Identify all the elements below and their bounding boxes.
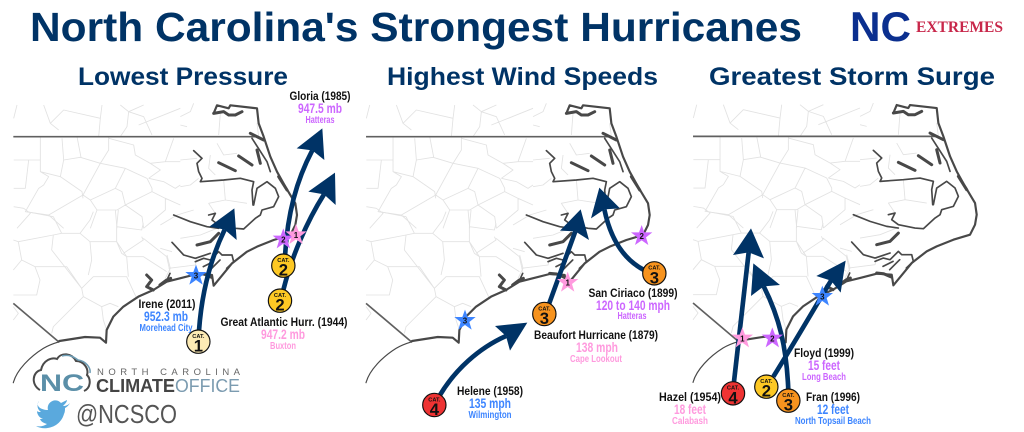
logo: NC Extremes: EXTREMES: [916, 19, 1003, 36]
star: rank 1: [557, 272, 578, 292]
marker: category 4: [423, 393, 446, 419]
label: San Ciriaco: Hatteras: [618, 310, 647, 322]
label: Floyd: 15 feet: [808, 358, 840, 373]
star: rank 1: 1: [740, 334, 745, 343]
title: North Carolina's Strongest Hurricanes: [30, 4, 802, 50]
map: North Carolina counties: [366, 103, 650, 383]
logo: NC Climate Office: NORTH CAROLINA: [97, 367, 241, 378]
star: rank 1: 1: [294, 231, 299, 240]
label: Hazel: 18 feet: [674, 402, 706, 417]
marker: category 2: [755, 375, 778, 401]
panel: highest wind speeds: [366, 63, 678, 421]
star: rank 2: 2: [281, 235, 286, 244]
marker: category 2: CAT.: [277, 258, 290, 264]
marker: category 3: [777, 389, 800, 415]
label: Fran: North Topsail Beach: [795, 415, 871, 427]
arrow: Gloria: [285, 128, 324, 257]
label: Helene: Wilmington: [468, 409, 512, 421]
label: Gloria: [290, 89, 350, 126]
marker: category 2: 2: [275, 296, 285, 315]
label: Hazel: [659, 390, 721, 427]
marker: category 3: 3: [540, 309, 549, 328]
label: Beaufort Hurricane: Beaufort Hurricane (1879): [534, 328, 658, 342]
logo: NC Climate Office: CLIMATE: [96, 375, 175, 396]
label: Floyd: Long Beach: [802, 371, 846, 383]
marker: category 3: 3: [784, 396, 793, 415]
star: rank 2: [273, 228, 294, 248]
marker: category 3: CAT.: [648, 266, 661, 272]
label: Beaufort Hurricane: [534, 328, 658, 365]
label: Gloria: 947.5 mb: [298, 101, 342, 116]
arrow: Helene: [440, 323, 527, 395]
label: Beaufort Hurricane: Cape Lookout: [570, 353, 622, 365]
label: San Ciriaco: [588, 286, 678, 322]
star: rank 2: [631, 225, 652, 245]
marker: category 2: [268, 289, 292, 315]
star: rank 3: 3: [463, 317, 468, 326]
label: San Ciriaco: 120 to 140 mph: [596, 298, 670, 313]
marker: category 2: [272, 254, 295, 280]
label: Hazel: Calabash: [672, 415, 708, 427]
handle: @NCSCO: [76, 401, 177, 429]
star: rank 1: [285, 224, 307, 244]
star: rank 3: [185, 265, 207, 285]
marker: category 4: 4: [430, 400, 440, 419]
logo: NC Climate Office: OFFICE: [175, 375, 240, 396]
arrow: Great Atlantic: [283, 173, 336, 290]
panel: lowest pressure: [13, 63, 350, 383]
marker: category 3: CAT.: [782, 393, 795, 399]
arrow: Irene: [199, 208, 237, 331]
label: Irene: Irene (2011): [138, 297, 196, 311]
map: North Carolina counties: [13, 103, 297, 383]
star: rank 2: 2: [639, 232, 644, 241]
hurricane tracks and markers: [721, 228, 846, 415]
label: Floyd: Floyd (1999): [794, 346, 854, 360]
label: Floyd: [794, 346, 854, 383]
marker: category 3: 3: [650, 268, 659, 287]
label: Beaufort Hurricane: 138 mph: [576, 340, 618, 355]
marker: category 4: 4: [728, 388, 738, 407]
marker: category 3: [643, 262, 666, 287]
label: Helene: Helene (1958): [457, 384, 523, 398]
label: Fran: [795, 390, 871, 427]
label: Fran: 12 feet: [817, 402, 849, 417]
label: Gloria: Gloria (1985): [290, 89, 350, 103]
marker: category 4: CAT.: [727, 386, 739, 392]
hurricane tracks and markers: [423, 188, 666, 419]
logo: NC Extremes: NC: [850, 3, 911, 50]
marker: category 2: 2: [762, 382, 771, 401]
hurricane tracks and markers: [185, 128, 336, 356]
heading: highest wind speeds: Highest Wind Speeds: [387, 63, 658, 91]
label: Irene: [138, 297, 196, 334]
label: Helene: [457, 384, 523, 421]
label: Irene: 952.3 mb: [144, 309, 188, 324]
marker: category 2: 2: [279, 261, 288, 280]
star: rank 3: 3: [194, 272, 199, 281]
arrow: Fran: [751, 263, 788, 391]
marker: category 1: [187, 330, 210, 356]
label: Helene: 135 mph: [469, 396, 511, 411]
star: rank 2: 2: [770, 334, 775, 343]
star: rank 2: [762, 327, 783, 347]
marker: category 3: CAT.: [538, 306, 551, 312]
label: Fran: Fran (1996): [806, 390, 860, 404]
star: rank 3: [454, 310, 476, 330]
marker: category 3: [533, 302, 556, 328]
marker: category 1: CAT.: [192, 334, 205, 340]
label: Irene: Morehead City: [140, 322, 193, 334]
label: Great Atlantic Hurricane: Great Atlantic Hurr. (1944): [220, 315, 348, 329]
star: rank 3: [812, 286, 833, 306]
arrow: Hazel: [733, 228, 764, 382]
logo: NC Extremes: [850, 3, 1003, 50]
arrow: Floyd: [773, 261, 846, 377]
logo: NC Climate Office: [34, 354, 241, 397]
arrow: San Ciriaco: [591, 188, 644, 270]
heading: lowest pressure: Lowest Pressure: [78, 63, 288, 91]
marker: category 2: CAT.: [274, 293, 286, 299]
marker: category 1: 1: [194, 337, 203, 356]
label: Great Atlantic Hurricane: Buxton: [270, 340, 296, 352]
marker: category 4: CAT.: [428, 397, 441, 403]
heading: greatest storm surge: Greatest Storm Surge: [709, 63, 995, 91]
icon: cloud: NC: [40, 370, 84, 397]
icon: cloud: [34, 354, 90, 397]
marker: category 4: [721, 382, 745, 407]
icon: twitter bird: [36, 400, 70, 428]
star: rank 1: 1: [565, 279, 570, 288]
panel: greatest storm surge: [659, 63, 995, 427]
label: Hazel: Hazel (1954): [659, 390, 721, 404]
label: Gloria: Hatteras: [306, 114, 335, 126]
arrow: Beaufort: [549, 209, 589, 304]
marker: category 2: CAT.: [760, 379, 773, 385]
star: rank 1: [732, 327, 753, 347]
map: North Carolina counties: [693, 103, 977, 382]
label: Great Atlantic Hurricane: 947.2 mb: [261, 327, 305, 342]
label: Great Atlantic Hurricane: [220, 315, 348, 352]
star: rank 3: 3: [820, 293, 825, 302]
label: San Ciriaco: San Ciriaco (1899): [588, 286, 678, 300]
